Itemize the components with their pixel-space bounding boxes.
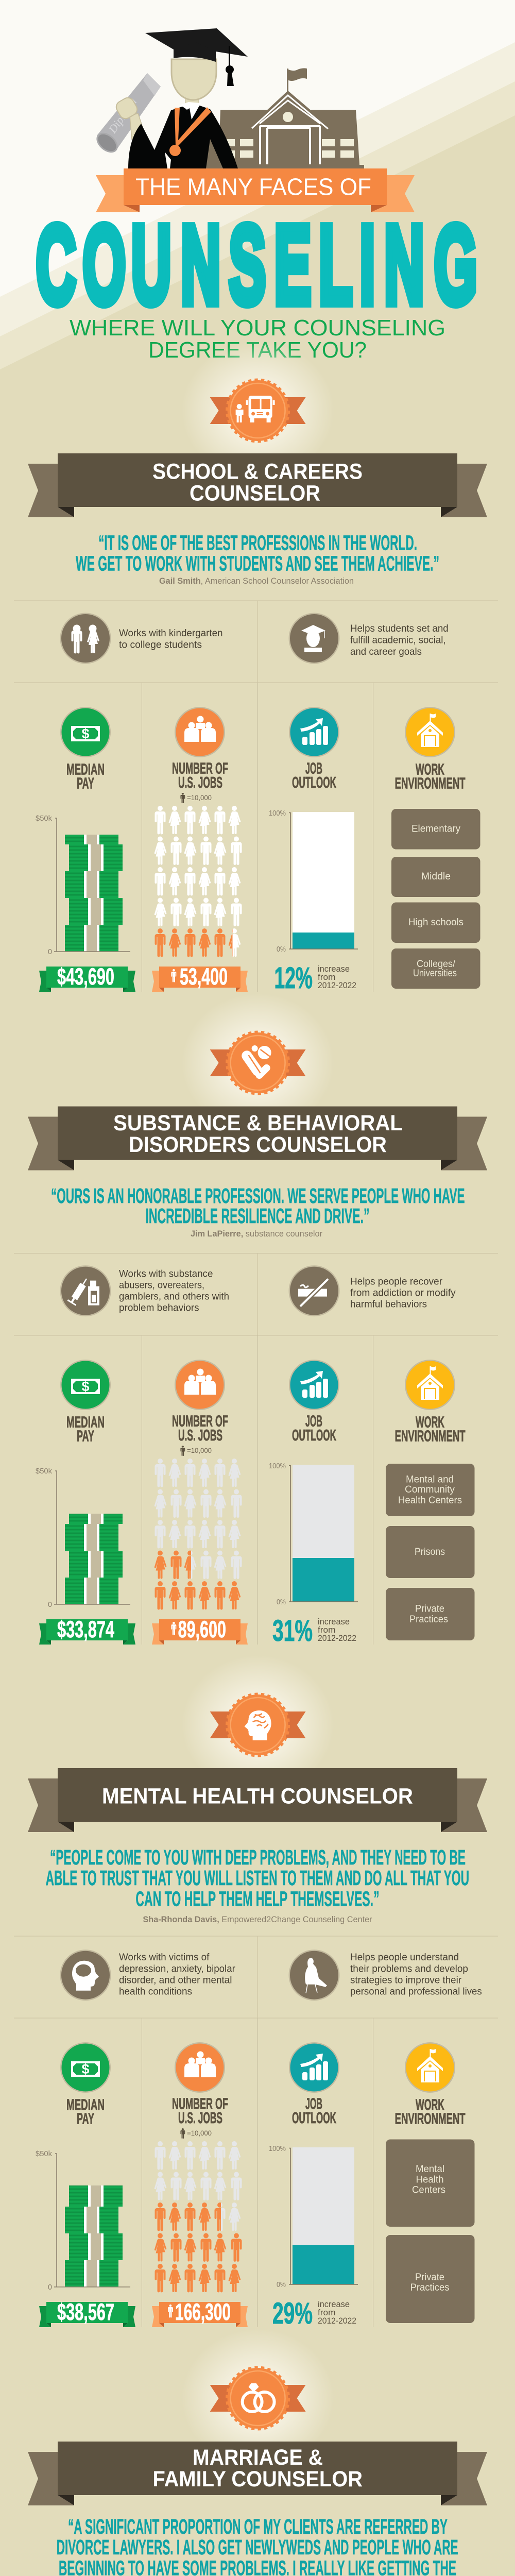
section 2 banner: SUBSTANCE & BEHAVIORAL	[113, 1111, 403, 1136]
chart: outlook bar: 0%	[277, 1598, 286, 1606]
environment boxes: Private	[415, 1603, 444, 1615]
section 1 attribution: Gail Smith, American School Counselor Association	[159, 576, 354, 586]
section 4 banner: FAMILY COUNSELOR	[152, 2467, 363, 2492]
section 1 role: works with: to college students	[119, 640, 202, 650]
icon: school	[405, 2042, 455, 2093]
stat: growth percent: from	[318, 2308, 335, 2317]
environment boxes: Mental	[416, 2164, 444, 2175]
heading: number of us jobs: NUMBER OF	[172, 2095, 228, 2113]
arm and fist	[130, 113, 143, 139]
chart: stack of money	[36, 814, 130, 956]
heading: work environment	[395, 2096, 466, 2128]
heading: median pay: MEDIAN	[66, 760, 105, 778]
title ribbon: THE MANY FACES OF	[135, 173, 371, 200]
section 2 role: works with: abusers, overeaters,	[119, 1280, 204, 1291]
section 3 badge: brain	[182, 1655, 334, 1794]
icon: school	[405, 1360, 455, 1410]
stat: growth percent: 2012-2022	[318, 980, 356, 990]
neck	[185, 95, 199, 108]
section 1 banner	[28, 453, 487, 517]
job outlook column	[269, 2042, 358, 2330]
section 2 role: works with: Works with substance	[119, 1268, 213, 1280]
stat: growth percent: 12%	[274, 961, 313, 995]
heading: work environment: WORK	[416, 2096, 444, 2113]
heading: median pay	[66, 2096, 105, 2128]
icon: graduate	[288, 613, 340, 664]
environment boxes: Middle	[421, 871, 451, 882]
section 1 role: works with	[60, 613, 222, 664]
environment boxes: Health Centers	[398, 1495, 462, 1506]
icon: head with brain	[60, 1950, 111, 2001]
us jobs column	[152, 1360, 248, 1645]
section 2 banner	[28, 1107, 487, 1171]
chart: outlook bar: 100%	[269, 2144, 286, 2153]
title ribbon	[96, 168, 415, 212]
icon: people	[175, 707, 225, 757]
tassel	[226, 46, 234, 86]
diploma scroll: Diploma	[106, 95, 139, 136]
section 1 role: helps: and career goals	[350, 647, 422, 657]
diploma scroll	[94, 73, 161, 156]
value ribbon: jobs	[152, 1616, 248, 1645]
section 3 role: works with: disorder, and other mental	[119, 1975, 232, 1986]
chart: stack of money	[36, 2149, 130, 2292]
heading: median pay: MEDIAN	[66, 1413, 105, 1431]
legend: one figure equals 10000: =10,000	[187, 1446, 212, 1454]
section 4 badge: wedding rings	[182, 2329, 334, 2468]
icon: money: $	[81, 726, 90, 741]
icon: growth chart	[289, 2042, 339, 2093]
section 2 badge: pills	[182, 993, 334, 1132]
chart: stack of money: $50k	[36, 2149, 52, 2158]
value ribbon: jobs	[152, 963, 248, 992]
stat: growth percent: increase	[318, 2299, 350, 2309]
chart: stack of money: $50k	[36, 814, 52, 823]
icon: money	[60, 1360, 111, 1410]
chart: stack of money: 0	[48, 1600, 52, 1609]
section 1 quote	[76, 531, 439, 575]
section 1 stats row	[36, 683, 480, 995]
us jobs column	[152, 2042, 248, 2327]
section 3 role: works with	[60, 1950, 235, 2001]
section 3 attribution: Sha-Rhonda Davis, Empowered2Change Counseling Center	[143, 1914, 372, 1924]
environment boxes: Prisons	[415, 1547, 445, 1557]
environment boxes: Colleges/	[417, 959, 456, 970]
pictogram: jobs	[154, 2141, 242, 2293]
heading: job outlook: JOB	[305, 2095, 322, 2113]
heading: work environment: ENVIRONMENT	[395, 2110, 466, 2128]
section 1 badge: school bus	[182, 341, 334, 480]
stat: growth percent: 2012-2022	[318, 2316, 356, 2326]
section 3 role: helps: personal and professional lives	[350, 1987, 482, 1997]
job outlook column	[269, 1360, 358, 1648]
heading: median pay: MEDIAN	[66, 2096, 105, 2113]
section 2 attribution: Jim LaPierre, substance counselor	[191, 1229, 322, 1239]
icon: growth chart	[289, 707, 339, 757]
section 3 banner	[28, 1768, 487, 1832]
section 2 role: helps	[288, 1265, 456, 1316]
section 3 role: helps: Helps people understand	[350, 1952, 459, 1963]
environment boxes: Private	[415, 2272, 444, 2283]
head	[171, 59, 216, 100]
chart: outlook bar: 0%	[277, 945, 286, 954]
section 2 role: helps: Helps people recover	[350, 1277, 443, 1287]
illustration: graduate holding diploma	[94, 28, 248, 168]
section 2 quote	[51, 1184, 465, 1228]
pictogram: jobs	[154, 1459, 242, 1609]
subtitle: DEGREE TAKE YOU?	[148, 337, 367, 363]
section 3 stats row	[36, 2018, 475, 2330]
environment boxes: Health	[416, 2175, 444, 2185]
section 3 role: works with: health conditions	[119, 1987, 192, 1997]
chart: outlook bar	[269, 809, 358, 954]
sash and medal	[175, 107, 211, 146]
heading: job outlook: JOB	[305, 759, 322, 777]
legend: one figure equals 10000: =10,000	[187, 793, 212, 802]
heading: number of us jobs: NUMBER OF	[172, 1412, 228, 1430]
stat: growth percent: from	[318, 972, 335, 982]
section 2 role dividers	[14, 1253, 498, 1335]
stat: growth percent: 31%	[272, 1614, 313, 1648]
heading: job outlook: OUTLOOK	[292, 1426, 336, 1444]
heading: job outlook: JOB	[305, 1412, 322, 1430]
section 3 banner: MENTAL HEALTH COUNSELOR	[102, 1784, 413, 1808]
section 3 quote	[46, 1845, 469, 1910]
value ribbon: jobs	[152, 2299, 248, 2327]
environment boxes	[386, 1464, 475, 1640]
section 1 role: works with: Works with kindergarten	[119, 628, 222, 639]
chart: outlook bar	[269, 1462, 358, 1606]
icon: people	[175, 1360, 225, 1410]
section 2 role: helps: harmful behaviors	[350, 1299, 427, 1310]
section 1 role: helps: Helps students set and	[350, 623, 449, 634]
heading: job outlook	[292, 759, 336, 791]
stat: growth percent: 2012-2022	[318, 1633, 356, 1643]
subtitle	[70, 315, 445, 363]
section 3 role: helps: strategies to improve their	[350, 1975, 462, 1986]
chart: outlook bar: 100%	[269, 809, 286, 818]
icon: money: $	[81, 1379, 90, 1394]
heading: work environment: WORK	[416, 760, 444, 778]
heading: work environment	[395, 1413, 466, 1445]
heading: work environment: WORK	[416, 1413, 444, 1431]
environment boxes: Practices	[410, 2282, 449, 2293]
heading: median pay	[66, 1413, 105, 1445]
icon: money	[60, 2042, 111, 2093]
environment boxes: Centers	[412, 2184, 445, 2196]
chart: stack of money: $50k	[36, 1467, 52, 1476]
heading: job outlook	[292, 2095, 336, 2127]
icon: seated woman	[288, 1950, 340, 2001]
section 4 banner: MARRIAGE &	[193, 2445, 323, 2470]
median pay column	[36, 2042, 135, 2327]
environment boxes: Practices	[409, 1614, 448, 1625]
gown	[128, 106, 238, 168]
heading: number of us jobs: U.S. JOBS	[178, 2109, 222, 2127]
legend: one figure equals 10000	[180, 793, 212, 803]
legend: one figure equals 10000: =10,000	[187, 2129, 212, 2137]
us jobs column	[152, 707, 248, 992]
icon: money: $	[81, 2061, 90, 2077]
subtitle: WHERE WILL YOUR COUNSELING	[70, 315, 445, 341]
heading: median pay	[66, 760, 105, 792]
section 1 banner: COUNSELOR	[190, 481, 320, 506]
stat: growth percent: increase	[318, 1617, 350, 1626]
section 2 banner: DISORDERS COUNSELOR	[129, 1132, 387, 1157]
value ribbon: jobs: 89,600	[178, 1616, 226, 1642]
stat: growth percent: from	[318, 1625, 335, 1635]
section 2 role: works with	[60, 1265, 229, 1316]
heading: work environment	[395, 760, 466, 792]
heading: median pay: PAY	[77, 2110, 94, 2128]
environment boxes: Mental and	[406, 1474, 454, 1485]
section 3 role: helps	[288, 1950, 482, 2001]
work environment column	[386, 1360, 475, 1640]
collar	[180, 102, 201, 120]
section 1 role: helps	[288, 613, 449, 664]
icon: two children	[60, 613, 111, 664]
illustration: school building	[215, 68, 364, 168]
heading: job outlook: OUTLOOK	[292, 773, 336, 791]
environment boxes: Community	[405, 1484, 455, 1495]
section 4 banner	[28, 2442, 487, 2505]
chart: outlook bar	[269, 2144, 358, 2289]
environment boxes: Elementary	[411, 824, 460, 835]
chart: stack of money: 0	[48, 2283, 52, 2292]
icon: no smoking	[288, 1265, 340, 1316]
value ribbon: median pay: $33,874	[57, 1616, 114, 1642]
heading: number of us jobs	[172, 2095, 228, 2127]
section 3 role: works with: Works with victims of	[119, 1952, 210, 1963]
icon: growth chart	[289, 1360, 339, 1410]
section 1 role dividers	[14, 601, 498, 683]
heading: work environment: ENVIRONMENT	[395, 774, 466, 792]
value ribbon: median pay: $43,690	[57, 963, 114, 990]
section 4 quote	[57, 2515, 458, 2576]
median pay column	[36, 1360, 135, 1645]
heading: number of us jobs: NUMBER OF	[172, 759, 228, 777]
environment boxes	[391, 809, 480, 989]
heading: median pay: PAY	[77, 774, 94, 792]
heading: number of us jobs	[172, 1412, 228, 1444]
environment boxes	[386, 2139, 475, 2323]
title: counseling: COUNSELING	[36, 203, 477, 327]
environment boxes: High schools	[408, 917, 464, 928]
icon: money	[60, 707, 111, 757]
chart: outlook bar: 100%	[269, 1462, 286, 1470]
legend: one figure equals 10000	[180, 1446, 212, 1456]
section 2 stats row	[36, 1335, 475, 1648]
section 3 role: works with: depression, anxiety, bipolar	[119, 1964, 235, 1974]
work environment column	[391, 707, 480, 989]
environment boxes: Universities	[413, 968, 457, 979]
median pay column	[36, 707, 135, 992]
heading: job outlook	[292, 1412, 336, 1444]
work environment column	[386, 2042, 475, 2323]
heading: number of us jobs	[172, 759, 228, 791]
heading: job outlook: OUTLOOK	[292, 2109, 336, 2127]
chart: stack of money	[36, 1467, 130, 1609]
stat: growth percent: 29%	[272, 2297, 313, 2330]
value ribbon: jobs: 53,400	[180, 963, 228, 990]
section 3 role dividers	[14, 1936, 498, 2018]
chart: outlook bar: 0%	[277, 2280, 286, 2289]
heading: work environment: ENVIRONMENT	[395, 1427, 466, 1445]
icon: syringe and bottle	[60, 1265, 111, 1316]
value ribbon: median pay: $38,567	[57, 2299, 114, 2325]
legend: one figure equals 10000	[180, 2128, 212, 2139]
section 1 role: helps: fulfill academic, social,	[350, 635, 446, 646]
section 3 role: helps: their problems and develop	[350, 1964, 468, 1974]
graduation cap	[174, 42, 216, 62]
stat: growth percent: increase	[318, 964, 350, 974]
heading: median pay: PAY	[77, 1427, 94, 1445]
section 1 banner: SCHOOL & CAREERS	[152, 460, 363, 484]
chart: stack of money: 0	[48, 947, 52, 956]
heading: number of us jobs: U.S. JOBS	[178, 1426, 222, 1444]
section 2 role: works with: gamblers, and others with	[119, 1291, 229, 1302]
section 2 role: works with: problem behaviors	[119, 1302, 199, 1314]
background: top diagonal bands	[0, 0, 515, 369]
heading: number of us jobs: U.S. JOBS	[178, 773, 222, 791]
icon: people	[175, 2042, 225, 2093]
value ribbon: jobs: 166,300	[175, 2299, 231, 2325]
pictogram: jobs	[154, 806, 242, 957]
icon: school	[405, 707, 455, 757]
section 2 role: helps: from addiction or modify	[350, 1288, 456, 1298]
job outlook column	[269, 707, 358, 995]
